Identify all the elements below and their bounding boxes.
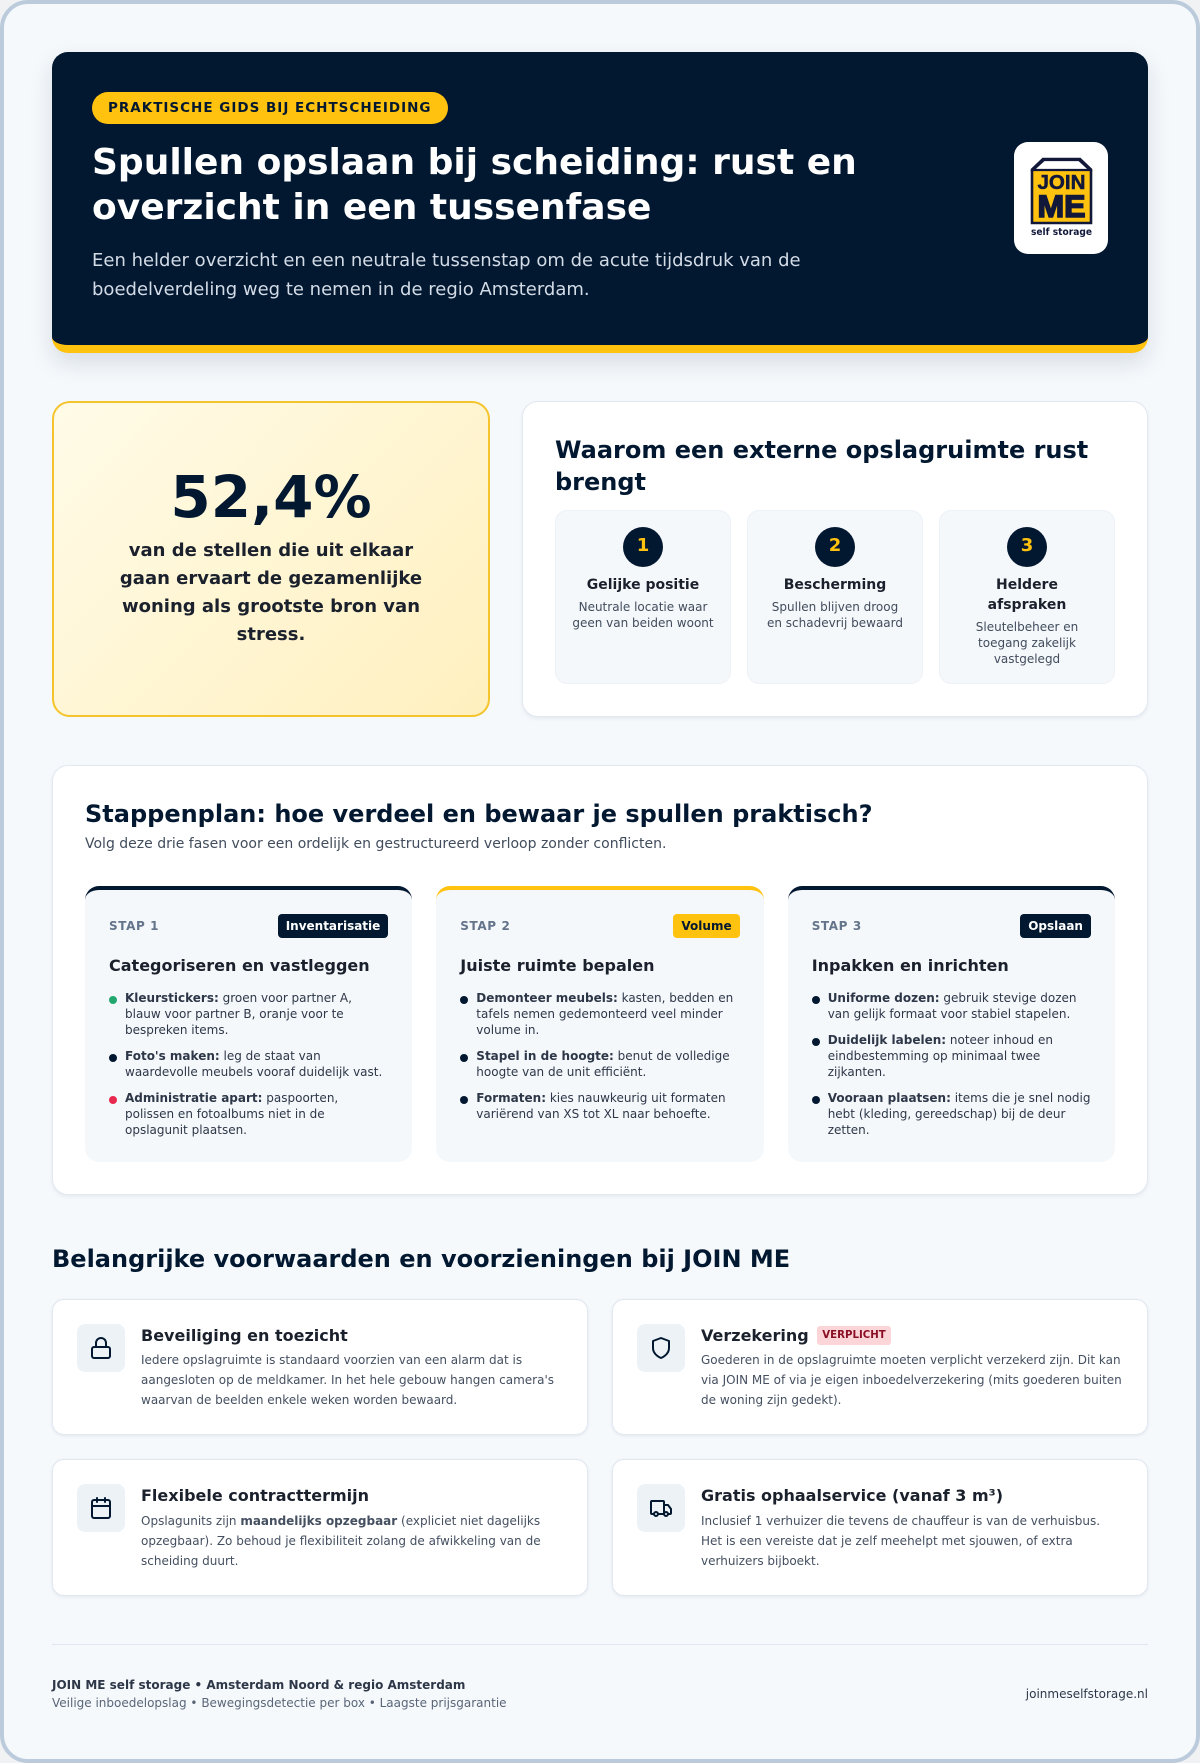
number 2: 2 xyxy=(829,535,841,556)
bullet text 3 xyxy=(476,1091,726,1121)
big number: 52,4% xyxy=(170,463,372,531)
bullet text 1: bespreken items. xyxy=(125,1023,228,1037)
statistic description: woning als grootste bron van xyxy=(122,596,420,617)
beveiliging text xyxy=(141,1353,554,1407)
bullet text 3: hebt (kleding, gereedschap) bij de deur xyxy=(828,1107,1065,1121)
logo: JOIN ME self storage: JOIN xyxy=(1038,171,1086,194)
step 1 tag: Inventarisatie xyxy=(286,919,380,933)
ophaalservice text: verhuizers bijboekt. xyxy=(701,1554,820,1568)
icon: truck xyxy=(637,1484,685,1532)
step 3 tag xyxy=(1020,914,1091,938)
stappenplan subtitle: Volg deze drie fasen voor een ordelijk en gestructureerd verloop zonder conflicten. xyxy=(85,836,666,852)
footer xyxy=(52,1644,1148,1715)
bullet text 2: waardevolle meubels vooraf duidelijk vast. xyxy=(125,1065,382,1079)
bullet navy xyxy=(460,1054,468,1062)
statistic description: gaan ervaart de gezamenlijke xyxy=(120,568,422,589)
bullet text 1: tafels nemen gedemonteerd veel minder xyxy=(476,1007,723,1021)
contracttermijn title: Flexibele contracttermijn xyxy=(141,1486,369,1505)
bullet text 1: Kleurstickers: groen voor partner A, xyxy=(125,991,352,1005)
bullet text 2: Duidelijk labelen: noteer inhoud en xyxy=(828,1033,1053,1047)
beveiliging text: Iedere opslagruimte is standaard voorzien van een alarm dat is xyxy=(141,1353,522,1367)
bullet text 2 xyxy=(476,1049,730,1079)
hero subtitle: Een helder overzicht en een neutrale tussenstap om de acute tijdsdruk van de xyxy=(92,250,801,270)
logo: JOIN ME self storage: self storage xyxy=(1031,227,1092,238)
bullet text 1: volume in. xyxy=(476,1023,539,1037)
panel: stappenplan xyxy=(52,765,1148,1195)
bullet text 1 xyxy=(125,991,352,1037)
bullet text 1: Uniforme dozen: gebruik stevige dozen xyxy=(828,991,1076,1005)
step 1 tag xyxy=(278,914,388,938)
reason 3 text: toegang zakelijk xyxy=(978,636,1076,650)
contracttermijn text: scheiding duurt. xyxy=(141,1554,238,1568)
bullet text 1: blauw voor partner B, oranje voor te xyxy=(125,1007,344,1021)
panel: statistic xyxy=(52,401,490,717)
step 3 title: Inpakken en inrichten xyxy=(812,956,1009,974)
step 2 label: STAP 2 xyxy=(460,919,510,933)
ophaalservice text: Het is een vereiste dat je zelf meehelpt met sjouwen, of extra xyxy=(701,1534,1073,1548)
reason 2 text xyxy=(767,600,903,630)
bullet navy xyxy=(109,1054,117,1062)
panel: waarom externe opslag xyxy=(522,401,1148,717)
bullet text 2: Foto's maken: leg de staat van xyxy=(125,1049,321,1063)
panel heading xyxy=(555,436,1088,496)
reason 3 text xyxy=(976,620,1078,666)
hero title: overzicht in een tussenfase xyxy=(92,186,651,228)
bullet text 3 xyxy=(125,1091,338,1137)
bullet red xyxy=(109,1096,117,1104)
icon: lock xyxy=(77,1324,125,1372)
contracttermijn text: Opslagunits zijn maandelijks opzegbaar (expliciet niet dagelijks xyxy=(141,1514,540,1528)
bullet text 3: opslagunit plaatsen. xyxy=(125,1123,247,1137)
step 3 xyxy=(788,886,1115,1162)
verzekering text: via JOIN ME of via je eigen inboedelverzekering (mits goederen buiten xyxy=(701,1373,1122,1387)
reason 2 xyxy=(747,510,923,684)
panel heading: brengt xyxy=(555,468,646,496)
feature: beveiliging xyxy=(52,1299,588,1435)
bullet text 2 xyxy=(125,1049,382,1079)
beveiliging title: Beveiliging en toezicht xyxy=(141,1326,348,1345)
bullet text 3: zetten. xyxy=(828,1123,870,1137)
icon: shield xyxy=(637,1324,685,1372)
ophaalservice title: Gratis ophaalservice (vanaf 3 m³) xyxy=(701,1486,1003,1505)
bullet green xyxy=(109,996,117,1004)
bullet text 3 xyxy=(828,1091,1090,1137)
contracttermijn text: opzegbaar). Zo behoud je flexibiliteit zolang de afwikkeling van de xyxy=(141,1534,541,1548)
number 1 xyxy=(623,527,663,567)
reason 3 text: vastgelegd xyxy=(994,652,1060,666)
step 2 tag: Volume xyxy=(681,919,732,933)
reason 3 xyxy=(939,510,1115,684)
verzekering text xyxy=(701,1353,1122,1407)
bullet navy xyxy=(460,996,468,1004)
stappenplan heading: Stappenplan: hoe verdeel en bewaar je spullen praktisch? xyxy=(85,800,872,828)
feature: verzekering xyxy=(612,1299,1148,1435)
reason 3 title xyxy=(988,577,1066,613)
bullet text 1: van gelijk formaat voor stabiel stapelen. xyxy=(828,1007,1070,1021)
verzekering title: Verzekering xyxy=(701,1326,809,1345)
bullet text 2: eindbestemming op minimaal twee xyxy=(828,1049,1040,1063)
verzekering text: de woning zijn gedekt). xyxy=(701,1393,841,1407)
hero subtitle xyxy=(92,250,801,300)
bullet text 2: zijkanten. xyxy=(828,1065,886,1079)
reason 3 title: afspraken xyxy=(988,597,1066,613)
hero badge: PRAKTISCHE GIDS BIJ ECHTSCHEIDING xyxy=(108,100,431,116)
hero title xyxy=(92,142,857,228)
footer tagline: Veilige inboedelopslag • Bewegingsdetectie per box • Laagste prijsgarantie xyxy=(52,1696,507,1710)
reason 3 title: Heldere xyxy=(996,577,1058,593)
beveiliging text: waarvan de beelden enkele weken worden bewaard. xyxy=(141,1393,457,1407)
step 3 tag: Opslaan xyxy=(1028,919,1083,933)
step 1 xyxy=(85,886,412,1162)
feature: ophaalservice xyxy=(612,1459,1148,1596)
reason 2 text: en schadevrij bewaard xyxy=(767,616,903,630)
verzekering text: Goederen in de opslagruimte moeten verplicht verzekerd zijn. Dit kan xyxy=(701,1353,1121,1367)
beveiliging text: aangesloten op de meldkamer. In het hele gebouw hangen camera's xyxy=(141,1373,554,1387)
reason 1 text: geen van beiden woont xyxy=(572,616,714,630)
bullet text 3: Formaten: kies nauwkeurig uit formaten xyxy=(476,1091,726,1105)
footer website: joinmeselfstorage.nl xyxy=(1026,1687,1148,1701)
bullet navy xyxy=(812,1096,820,1104)
bullet text 1 xyxy=(828,991,1076,1021)
reason 1 xyxy=(555,510,731,684)
logo: JOIN ME self storage xyxy=(1014,142,1108,254)
number 3 xyxy=(1007,527,1047,567)
hero badge xyxy=(92,92,448,124)
step 2 xyxy=(436,886,764,1162)
bullet navy xyxy=(812,996,820,1004)
panel heading: Waarom een externe opslagruimte rust xyxy=(555,436,1088,464)
footer company: JOIN ME self storage • Amsterdam Noord & regio Amsterdam xyxy=(52,1678,465,1692)
hero subtitle: boedelverdeling weg te nemen in de regio Amsterdam. xyxy=(92,278,590,300)
feature: contracttermijn xyxy=(52,1459,588,1596)
statistic description: stress. xyxy=(237,624,305,645)
bullet text 3: Vooraan plaatsen: items die je snel nodig xyxy=(828,1091,1090,1105)
bullet navy xyxy=(460,1096,468,1104)
step 2 tag xyxy=(673,914,740,938)
bullet text 2: hoogte van de unit efficiënt. xyxy=(476,1065,646,1079)
hero banner xyxy=(52,52,1148,353)
step 1 title: Categoriseren en vastleggen xyxy=(109,956,370,974)
reason 1 text: Neutrale locatie waar xyxy=(579,600,707,614)
step 1 label: STAP 1 xyxy=(109,919,159,933)
number 3: 3 xyxy=(1021,535,1033,556)
bullet text 3: Administratie apart: paspoorten, xyxy=(125,1091,338,1105)
bullet text 3: variërend van XS tot XL naar behoefte. xyxy=(476,1107,711,1121)
ophaalservice text xyxy=(701,1514,1100,1568)
bullet text 2 xyxy=(828,1033,1053,1079)
number 2 xyxy=(815,527,855,567)
reason 2 title: Bescherming xyxy=(784,577,886,593)
bullet text 3: polissen en fotoalbums niet in de xyxy=(125,1107,325,1121)
reason 2 text: Spullen blijven droog xyxy=(772,600,898,614)
statistic description: van de stellen die uit elkaar xyxy=(129,540,413,561)
verplicht tag: VERPLICHT xyxy=(822,1330,886,1341)
verplicht tag xyxy=(817,1326,891,1345)
icon: calendar xyxy=(77,1484,125,1532)
bullet text 2: Stapel in de hoogte: benut de volledige xyxy=(476,1049,730,1063)
statistic description xyxy=(120,540,422,645)
reason 1 title: Gelijke positie xyxy=(587,577,699,593)
section heading: voorwaarden: Belangrijke voorwaarden en voorzieningen bij JOIN ME xyxy=(52,1245,790,1273)
bullet text 1: Demonteer meubels: kasten, bedden en xyxy=(476,991,733,1005)
reason 3 text: Sleutelbeheer en xyxy=(976,620,1078,634)
hero title: Spullen opslaan bij scheiding: rust en xyxy=(92,142,857,182)
bullet text 1 xyxy=(476,991,733,1037)
ophaalservice text: Inclusief 1 verhuizer die tevens de chauffeur is van de verhuisbus. xyxy=(701,1514,1100,1528)
step 3 label: STAP 3 xyxy=(812,919,862,933)
reason 1 text xyxy=(572,600,714,630)
step 2 title: Juiste ruimte bepalen xyxy=(460,956,655,974)
logo: JOIN ME self storage: ME xyxy=(1038,188,1086,224)
number 1: 1 xyxy=(637,535,649,556)
bullet navy xyxy=(812,1038,820,1046)
contracttermijn text xyxy=(141,1514,541,1568)
